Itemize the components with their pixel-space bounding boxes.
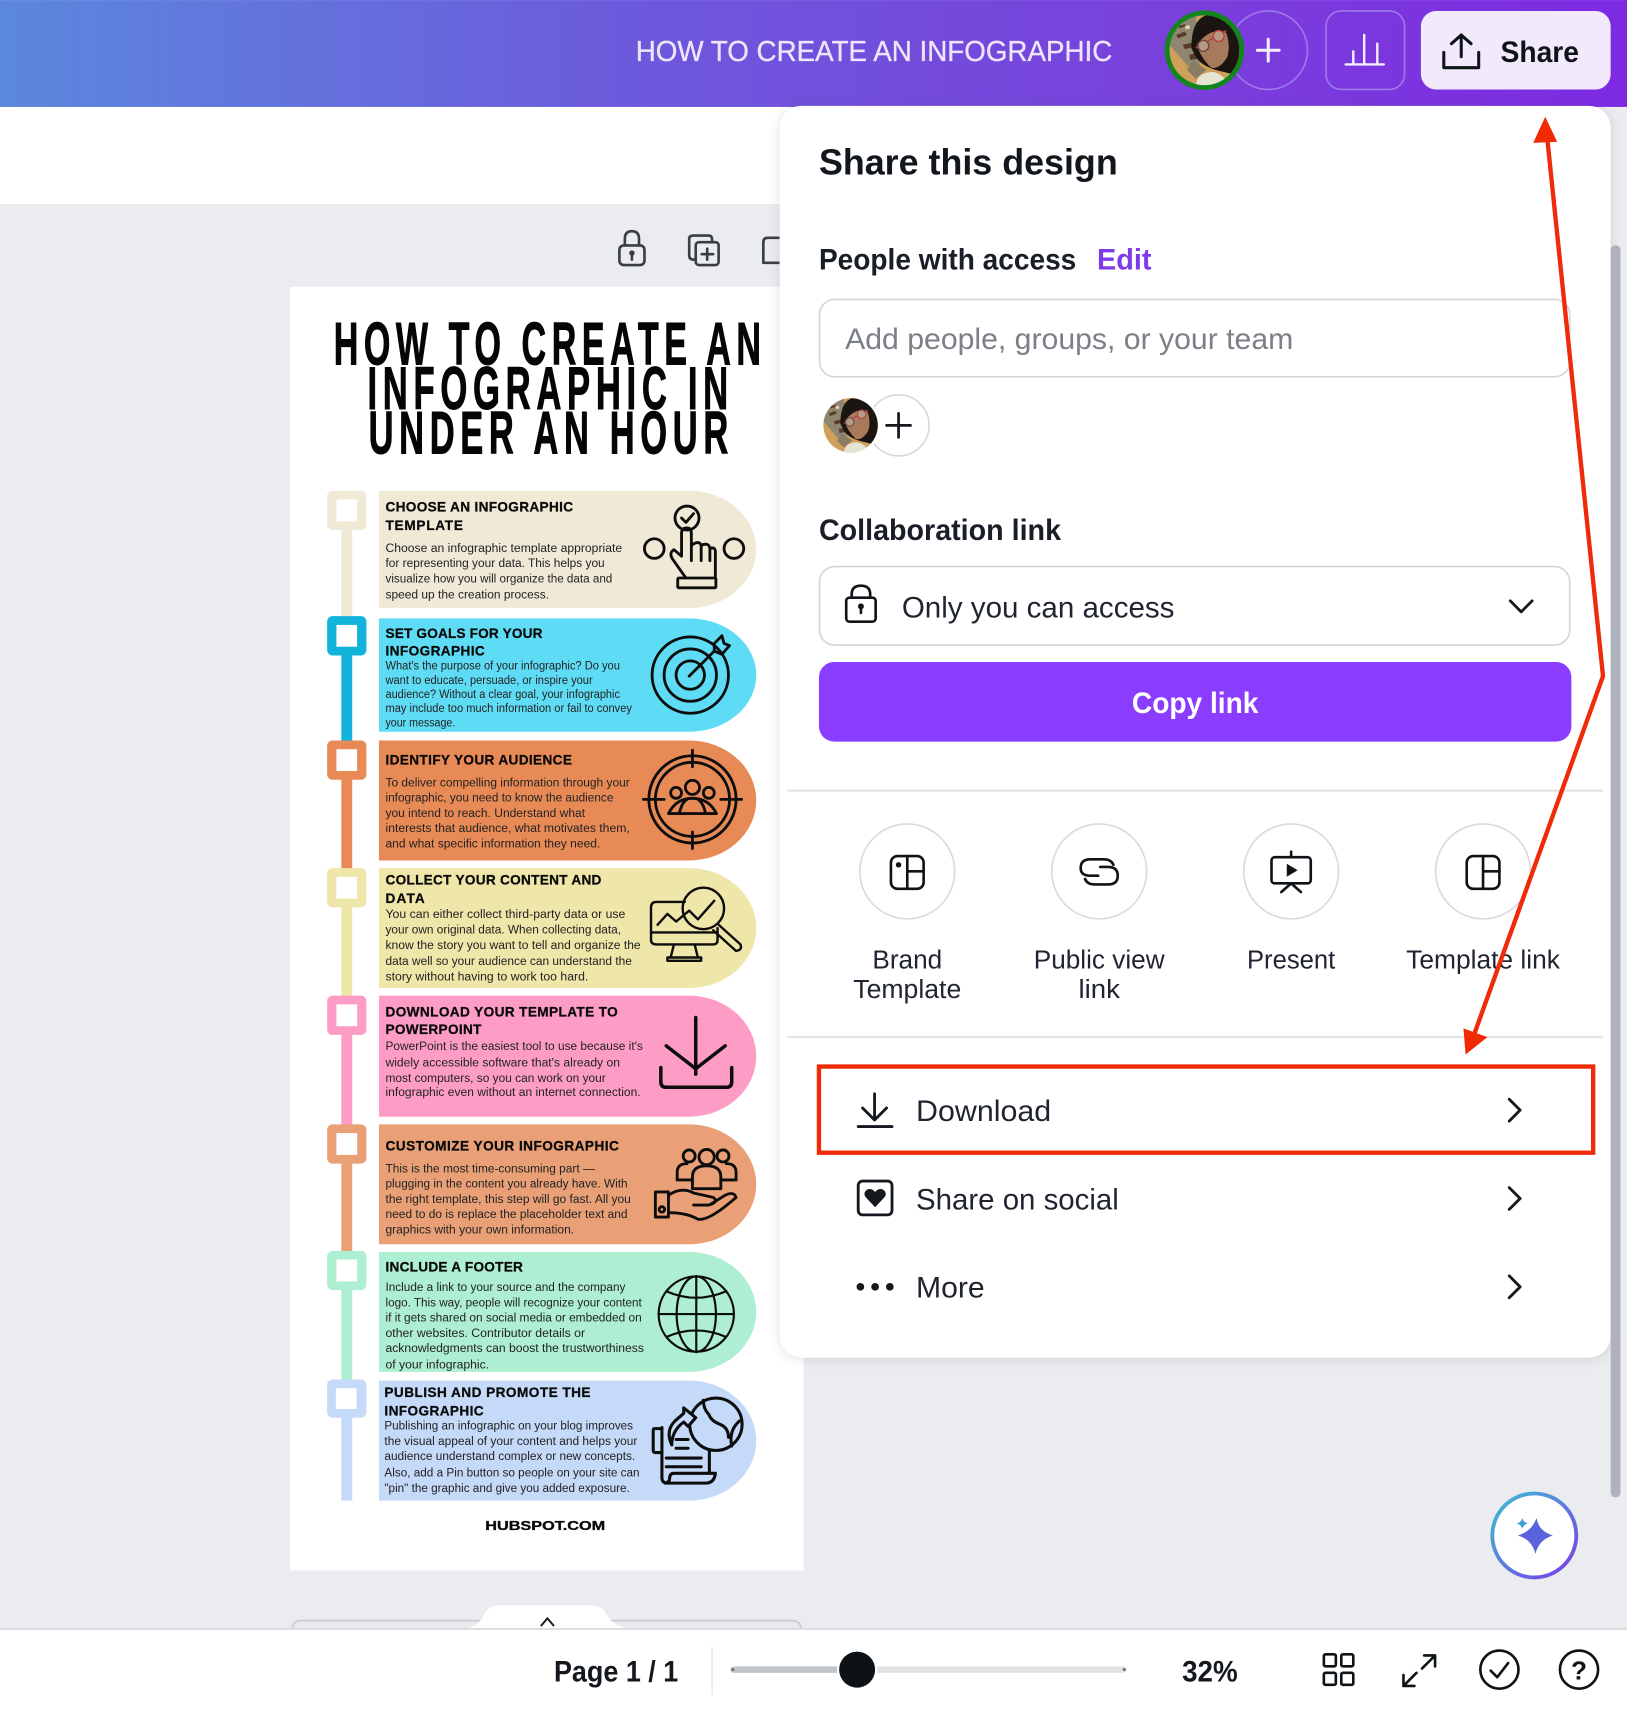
step 7: footer (327, 1251, 756, 1372)
scrollbar (1611, 245, 1620, 1497)
step 2: set goals: want to educate, persuade, or inspire your (385, 674, 593, 687)
step 8: publish and promote: the visual appeal of your content and helps your (384, 1435, 637, 1448)
step 7: footer: acknowledgments can boost the trustworthiness (385, 1342, 644, 1355)
step 1: choose template: visualize how you will organize the data and (385, 572, 612, 585)
header title: HOW TO CREATE AN INFOGRAPHIC (636, 36, 1112, 68)
step 3: identify audience (327, 740, 756, 860)
step 8: publish and promote: "pin" the graphic and give you added exposure. (384, 1482, 630, 1495)
option: present: Present (1247, 944, 1336, 974)
icon: help: ? (1571, 1655, 1587, 1685)
step 3: identify audience: and what specific information they need. (385, 837, 600, 850)
step 3: identify audience: infographic, you need to know the audience (385, 792, 614, 805)
step 7: footer: of your infographic. (385, 1359, 489, 1372)
toolbar strip (0, 107, 829, 204)
infographic title: HOW TO CREATE AN (334, 310, 767, 377)
collaboration link section: Only you can access (902, 591, 1174, 624)
option: public view link (1034, 824, 1165, 1004)
user avatar (1165, 10, 1244, 90)
step 4: collect content: know the story you want to tell and organize the (385, 939, 641, 952)
panel heading: Share this design (819, 142, 1118, 183)
icon: globe (659, 1276, 734, 1352)
header bar (0, 0, 1627, 107)
step 6: customize: the right template, this step will go fast. All you (385, 1193, 631, 1206)
icon: monitor and magnifier (651, 888, 741, 961)
infographic page (290, 287, 804, 1570)
icon: document and globe (653, 1398, 742, 1483)
share button: Share (1501, 36, 1579, 69)
team avatars (821, 395, 929, 456)
step 8: publish and promote (327, 1380, 756, 1501)
icon: target (652, 636, 730, 713)
step 7: footer: INCLUDE A FOOTER (385, 1260, 523, 1275)
step 4: collect content (327, 868, 756, 988)
option: public view link: Public view (1034, 944, 1165, 974)
step 1: choose template: for representing your data. This helps you (385, 557, 605, 570)
people with access section: Add people, groups, or your team (845, 323, 1293, 356)
menu row: share on social (858, 1181, 1520, 1216)
red arrows (1463, 117, 1603, 1055)
infographic footer source: HUBSPOT.COM (485, 1519, 605, 1533)
step 5: download template: most computers, so you can work on your (385, 1072, 606, 1085)
icon: download arrow (661, 1017, 732, 1087)
callout box around download (819, 1067, 1593, 1153)
step 1: choose template: speed up the creation process. (385, 589, 549, 602)
zoom percent: 32% (1182, 1656, 1238, 1689)
step 4: collect content: your own original data. When collecting data, (385, 924, 621, 937)
step 8: publish and promote: Also, add a Pin button so people on your site can (384, 1467, 640, 1480)
copy link button (819, 662, 1571, 742)
step 3: identify audience: IDENTIFY YOUR AUDIENCE (385, 752, 572, 767)
step 6: customize: CUSTOMIZE YOUR INFOGRAPHIC (385, 1139, 619, 1154)
step 5: download template: widely accessible software that's already on (384, 1057, 620, 1070)
step 4: collect content: DATA (385, 891, 425, 906)
step 8: publish and promote: PUBLISH AND PROMOTE THE (384, 1385, 590, 1400)
step 4: collect content: COLLECT YOUR CONTENT AND (385, 872, 602, 887)
step 8: publish and promote: audience understand complex or new concepts. (384, 1450, 635, 1463)
timeline connectors (341, 513, 352, 1501)
step 7: footer: Include a link to your source and the company (385, 1281, 626, 1294)
icon: help (1560, 1651, 1598, 1689)
step 2: set goals: may include too much information or fail to convey (385, 702, 632, 715)
people with access section: Edit (1097, 243, 1152, 276)
step 6: customize: graphics with your own information. (385, 1223, 574, 1236)
step 1: choose template: Choose an infographic template appropriate (385, 542, 623, 555)
add collaborator button (1229, 11, 1307, 89)
icon: hand holding people (655, 1149, 736, 1219)
step 8: publish and promote: Publishing an infographic on your blog improves (384, 1420, 633, 1433)
step 3: identify audience: you intend to reach. Understand what (385, 807, 586, 820)
step 3: identify audience: interests that audience, what motivates them, (385, 822, 630, 835)
step 2: set goals: INFOGRAPHIC (385, 643, 485, 658)
option: template link (1406, 824, 1561, 974)
copy link button: Copy link (1132, 687, 1259, 720)
step 2: set goals: your message. (385, 716, 455, 729)
icon: grid view (1324, 1654, 1353, 1685)
infographic title: UNDER AN HOUR (369, 400, 734, 467)
analytics button (1326, 11, 1405, 89)
people with access section (819, 243, 1570, 377)
step 4: collect content: data well so your audience can understand the (385, 955, 632, 968)
bottom status bar (0, 1605, 1627, 1710)
icon: padlock (846, 586, 876, 622)
icon: audience crosshair (643, 750, 742, 848)
step 4: collect content: You can either collect third-party data or use (385, 908, 626, 921)
step 5: download template (327, 996, 756, 1117)
zoom slider (731, 1649, 1126, 1690)
option: public view link: link (1078, 974, 1121, 1004)
option: present (1244, 824, 1339, 974)
infographic title (334, 310, 767, 467)
collaboration link section: Collaboration link (819, 514, 1062, 547)
icon: check status (1480, 1651, 1518, 1689)
step 8: publish and promote: INFOGRAPHIC (384, 1404, 484, 1419)
page action icons (619, 231, 779, 265)
step 6: customize: This is the most time-consuming part — (385, 1162, 595, 1175)
step 7: footer: if it gets shared on social media or embedded on (385, 1312, 642, 1325)
step 6: customize (327, 1124, 756, 1244)
menu row: more (857, 1272, 1520, 1305)
assistant button (1492, 1493, 1576, 1577)
step 3: identify audience: To deliver compelling information through your (385, 776, 630, 789)
step 5: download template: infographic even without an internet connection. (385, 1086, 641, 1099)
people with access section: People with access (819, 243, 1076, 276)
option: brand template (853, 824, 961, 1004)
step 1: choose template: CHOOSE AN INFOGRAPHIC (385, 499, 573, 514)
option: brand template: Template (853, 974, 961, 1004)
option: template link: Template link (1406, 944, 1561, 974)
share button (1421, 11, 1611, 89)
step 5: download template: PowerPoint is the easiest tool to use because it's (385, 1040, 643, 1053)
step 6: customize: plugging in the content you already have. With (385, 1178, 628, 1191)
step 6: customize: need to do is replace the placeholder text and (385, 1208, 628, 1221)
icon: fullscreen (1403, 1655, 1435, 1686)
step 2: set goals (327, 616, 756, 732)
menu row: download (858, 1094, 1520, 1128)
share panel (780, 106, 1611, 1358)
page counter: Page 1 / 1 (554, 1656, 678, 1689)
infographic title: INFOGRAPHIC IN (367, 355, 734, 422)
step 2: set goals: What's the purpose of your infographic? Do you (385, 660, 620, 673)
step 5: download template: POWERPOINT (385, 1022, 482, 1037)
step 1: choose template: TEMPLATE (385, 518, 463, 533)
step 5: download template: DOWNLOAD YOUR TEMPLATE TO (385, 1004, 618, 1019)
step 7: footer: other websites. Contributor details or (385, 1327, 585, 1340)
menu row: more: More (916, 1272, 985, 1305)
step 7: footer: logo. This way, people will recognize your content (385, 1296, 642, 1309)
option: brand template: Brand (872, 944, 942, 974)
step 2: set goals: audience? Without a clear goal, your infographic (385, 688, 620, 701)
step 2: set goals: SET GOALS FOR YOUR (385, 626, 543, 641)
collaboration link section (819, 514, 1570, 645)
step 1: choose template (327, 491, 756, 608)
icon: hand tapping (644, 506, 744, 588)
menu row: download: Download (916, 1095, 1051, 1128)
step 4: collect content: story without having to work too hard. (385, 970, 588, 983)
menu row: share on social: Share on social (916, 1183, 1119, 1216)
